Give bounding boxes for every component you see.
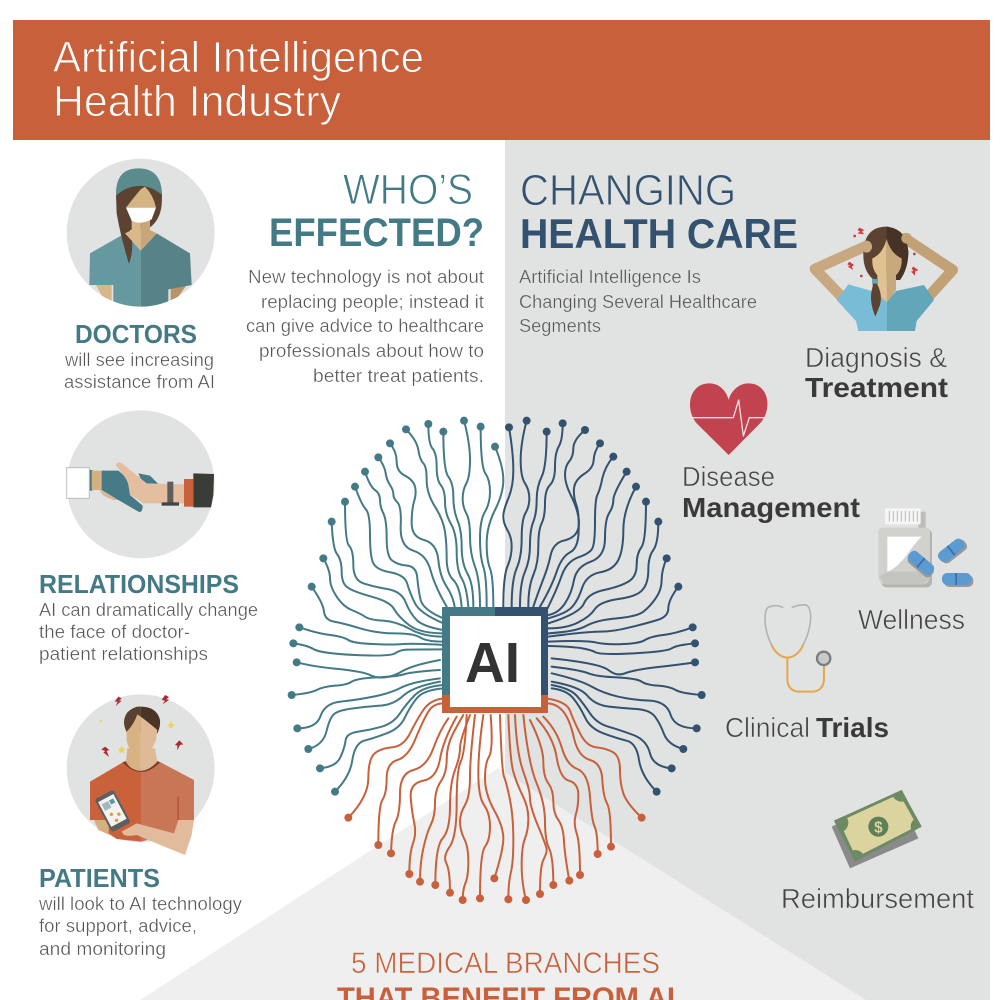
label: doctors: DOCTORS bbox=[75, 319, 197, 349]
label: disease management: Management bbox=[682, 492, 860, 523]
label: diagnosis and treatment: Diagnosis & bbox=[805, 342, 947, 373]
text block: who's effected description: better treat patients. bbox=[313, 365, 484, 386]
title banner bbox=[13, 20, 990, 140]
chart: AI circuit brain bbox=[292, 421, 702, 900]
label: patients: PATIENTS bbox=[39, 863, 160, 893]
label: doctors bbox=[64, 319, 215, 392]
icon: stethoscope bbox=[765, 605, 830, 692]
text block: who's effected description: New technology is not about bbox=[248, 266, 484, 287]
label: patients: and monitoring bbox=[39, 938, 166, 959]
label: doctors: assistance from AI bbox=[64, 371, 215, 392]
text block: who's effected description: can give advice to healthcare bbox=[246, 315, 484, 336]
label: doctors: will see increasing bbox=[64, 349, 214, 370]
label: diagnosis and treatment bbox=[805, 342, 948, 403]
label: patients: for support, advice, bbox=[39, 915, 197, 936]
label: relationships: RELATIONSHIPS bbox=[39, 569, 239, 599]
text block: who's effected description: replacing people; instead it bbox=[261, 291, 484, 312]
label: relationships: AI can dramatically change bbox=[39, 599, 258, 620]
icon: pill bottle and pills bbox=[878, 508, 973, 587]
label: reimbursement: Reimbursement bbox=[781, 883, 974, 914]
label: disease management bbox=[682, 461, 860, 523]
title banner: Health Industry bbox=[53, 77, 341, 126]
icon: patient with phone bbox=[67, 694, 215, 855]
heading: 5 medical branches bbox=[337, 947, 675, 1000]
text block: who's effected description: professionals about how to bbox=[259, 340, 484, 361]
label: relationships: patient relationships bbox=[39, 643, 208, 664]
heading: who's effected bbox=[269, 166, 484, 255]
panel: changing health care background bbox=[505, 140, 990, 1000]
text block: who's effected description bbox=[246, 266, 484, 386]
circuit traces: lower left teal bbox=[292, 660, 443, 792]
label: patients bbox=[38, 863, 243, 959]
icon: money stack: $ bbox=[874, 819, 883, 836]
heading: who's effected: WHO’S bbox=[343, 166, 473, 214]
text block: changing health care description: Artificial Intelligence Is bbox=[519, 266, 701, 287]
heading: 5 medical branches: 5 MEDICAL BRANCHES bbox=[351, 947, 660, 980]
label: diagnosis and treatment: Treatment bbox=[805, 372, 948, 403]
label: clinical trials bbox=[725, 712, 889, 743]
label: wellness: Wellness bbox=[858, 604, 965, 635]
circuit traces: top right navy bbox=[503, 421, 695, 654]
heading: who's effected: EFFECTED? bbox=[269, 211, 484, 255]
label: clinical trials: Clinical bbox=[725, 712, 810, 743]
icon: doctor bbox=[67, 159, 215, 310]
label: patients: will look to AI technology bbox=[38, 893, 243, 914]
label: relationships: the face of doctor- bbox=[39, 621, 190, 642]
text block: changing health care description: Changing Several Healthcare bbox=[519, 291, 757, 312]
icon: money stack bbox=[832, 790, 922, 868]
heading: changing health care bbox=[520, 166, 798, 257]
heading: changing health care: CHANGING bbox=[520, 166, 736, 215]
AI chip: AI bbox=[465, 631, 520, 695]
label: disease management: Disease bbox=[682, 461, 775, 492]
panel: medical branches background bbox=[140, 768, 866, 1000]
AI chip bbox=[442, 607, 548, 713]
title banner: Artificial Intelligence bbox=[53, 33, 424, 82]
icon: heart with pulse bbox=[690, 383, 767, 455]
text block: changing health care description: Segments bbox=[519, 315, 601, 336]
label: clinical trials: Trials bbox=[816, 712, 889, 743]
text block: changing health care description bbox=[519, 266, 757, 336]
icon: relationships handshake bbox=[67, 410, 215, 558]
circuit traces: bottom orange bbox=[348, 698, 642, 900]
icon: diagnosis woman with headache bbox=[815, 227, 953, 331]
label: relationships bbox=[39, 569, 258, 664]
circuit traces: lower right navy bbox=[552, 658, 702, 792]
heading: changing health care: HEALTH CARE bbox=[520, 210, 798, 257]
circuit traces: top left teal bbox=[293, 421, 503, 656]
